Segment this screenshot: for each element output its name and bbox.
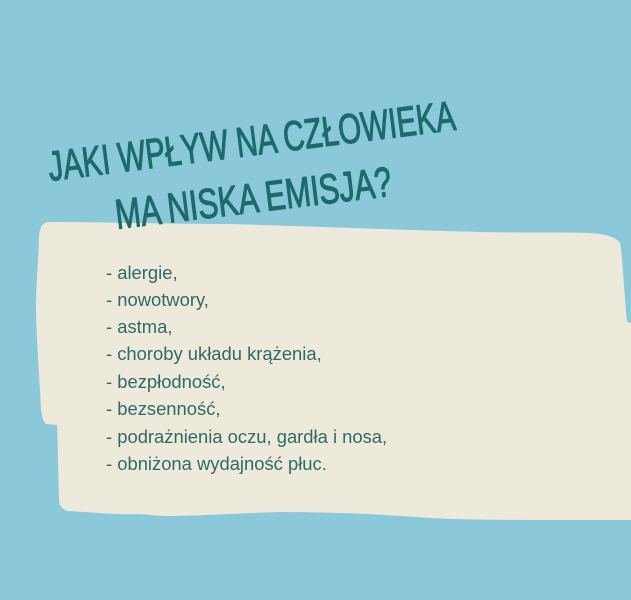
list item: - podrażnienia oczu, gardła i nosa,	[106, 426, 387, 447]
panel: cream paper background	[36, 222, 631, 520]
list of health effects	[106, 262, 387, 474]
list item: - bezpłodność,	[106, 371, 226, 392]
list item: - alergie,	[106, 262, 178, 283]
title	[45, 92, 458, 238]
list item: - obniżona wydajność płuc.	[106, 453, 327, 474]
list item: - choroby układu krążenia,	[106, 343, 322, 364]
title line 2: MA NISKA EMISJA?	[112, 158, 394, 238]
list item: - nowotwory,	[106, 289, 209, 310]
list item: - bezsenność,	[106, 398, 220, 419]
title line 1: JAKI WPŁYW NA CZŁOWIEKA	[45, 92, 458, 190]
list item: - astma,	[106, 316, 172, 337]
